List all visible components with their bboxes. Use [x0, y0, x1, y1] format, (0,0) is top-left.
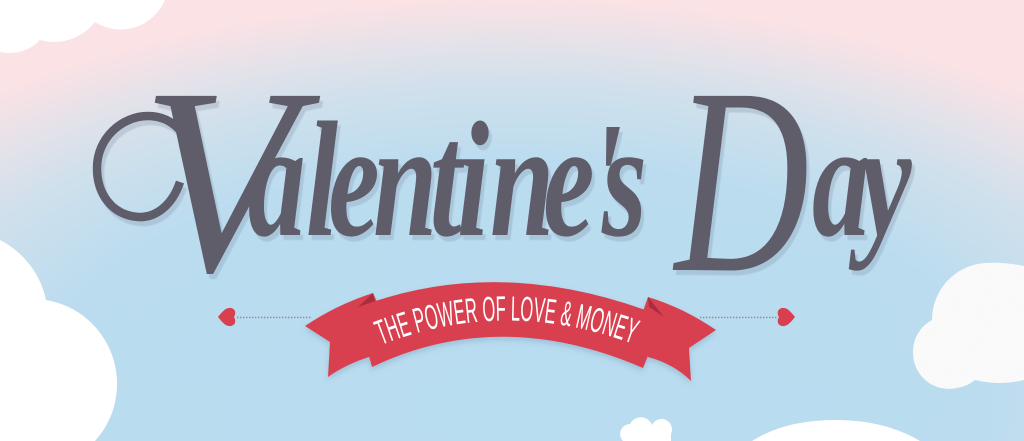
cloud: small bottom centre	[620, 417, 672, 441]
cloud: right, speckled	[913, 263, 1024, 389]
title initial V: V	[142, 34, 323, 328]
ribbon right tail	[640, 297, 716, 381]
ribbon text: THE POWER OF LOVE & MONEY	[372, 296, 641, 344]
cloud: bottom right	[752, 420, 920, 441]
icon: left heart	[218, 308, 235, 326]
icon: right heart	[778, 308, 795, 326]
title	[97, 32, 912, 328]
title text: alentine's	[248, 88, 647, 271]
ribbon main band	[356, 282, 664, 368]
ribbon left tail	[305, 293, 385, 377]
ribbon banner	[305, 282, 716, 381]
title text: D	[672, 32, 809, 328]
cloud: left	[0, 240, 117, 441]
ribbon left fold	[356, 293, 375, 309]
ribbon right fold	[648, 297, 664, 317]
cloud: top left	[0, 0, 165, 53]
title text: ay	[812, 88, 912, 271]
left dotted line with heart	[218, 308, 312, 326]
ornamental flourish on the V	[97, 116, 183, 217]
right dotted line with heart	[700, 308, 795, 326]
